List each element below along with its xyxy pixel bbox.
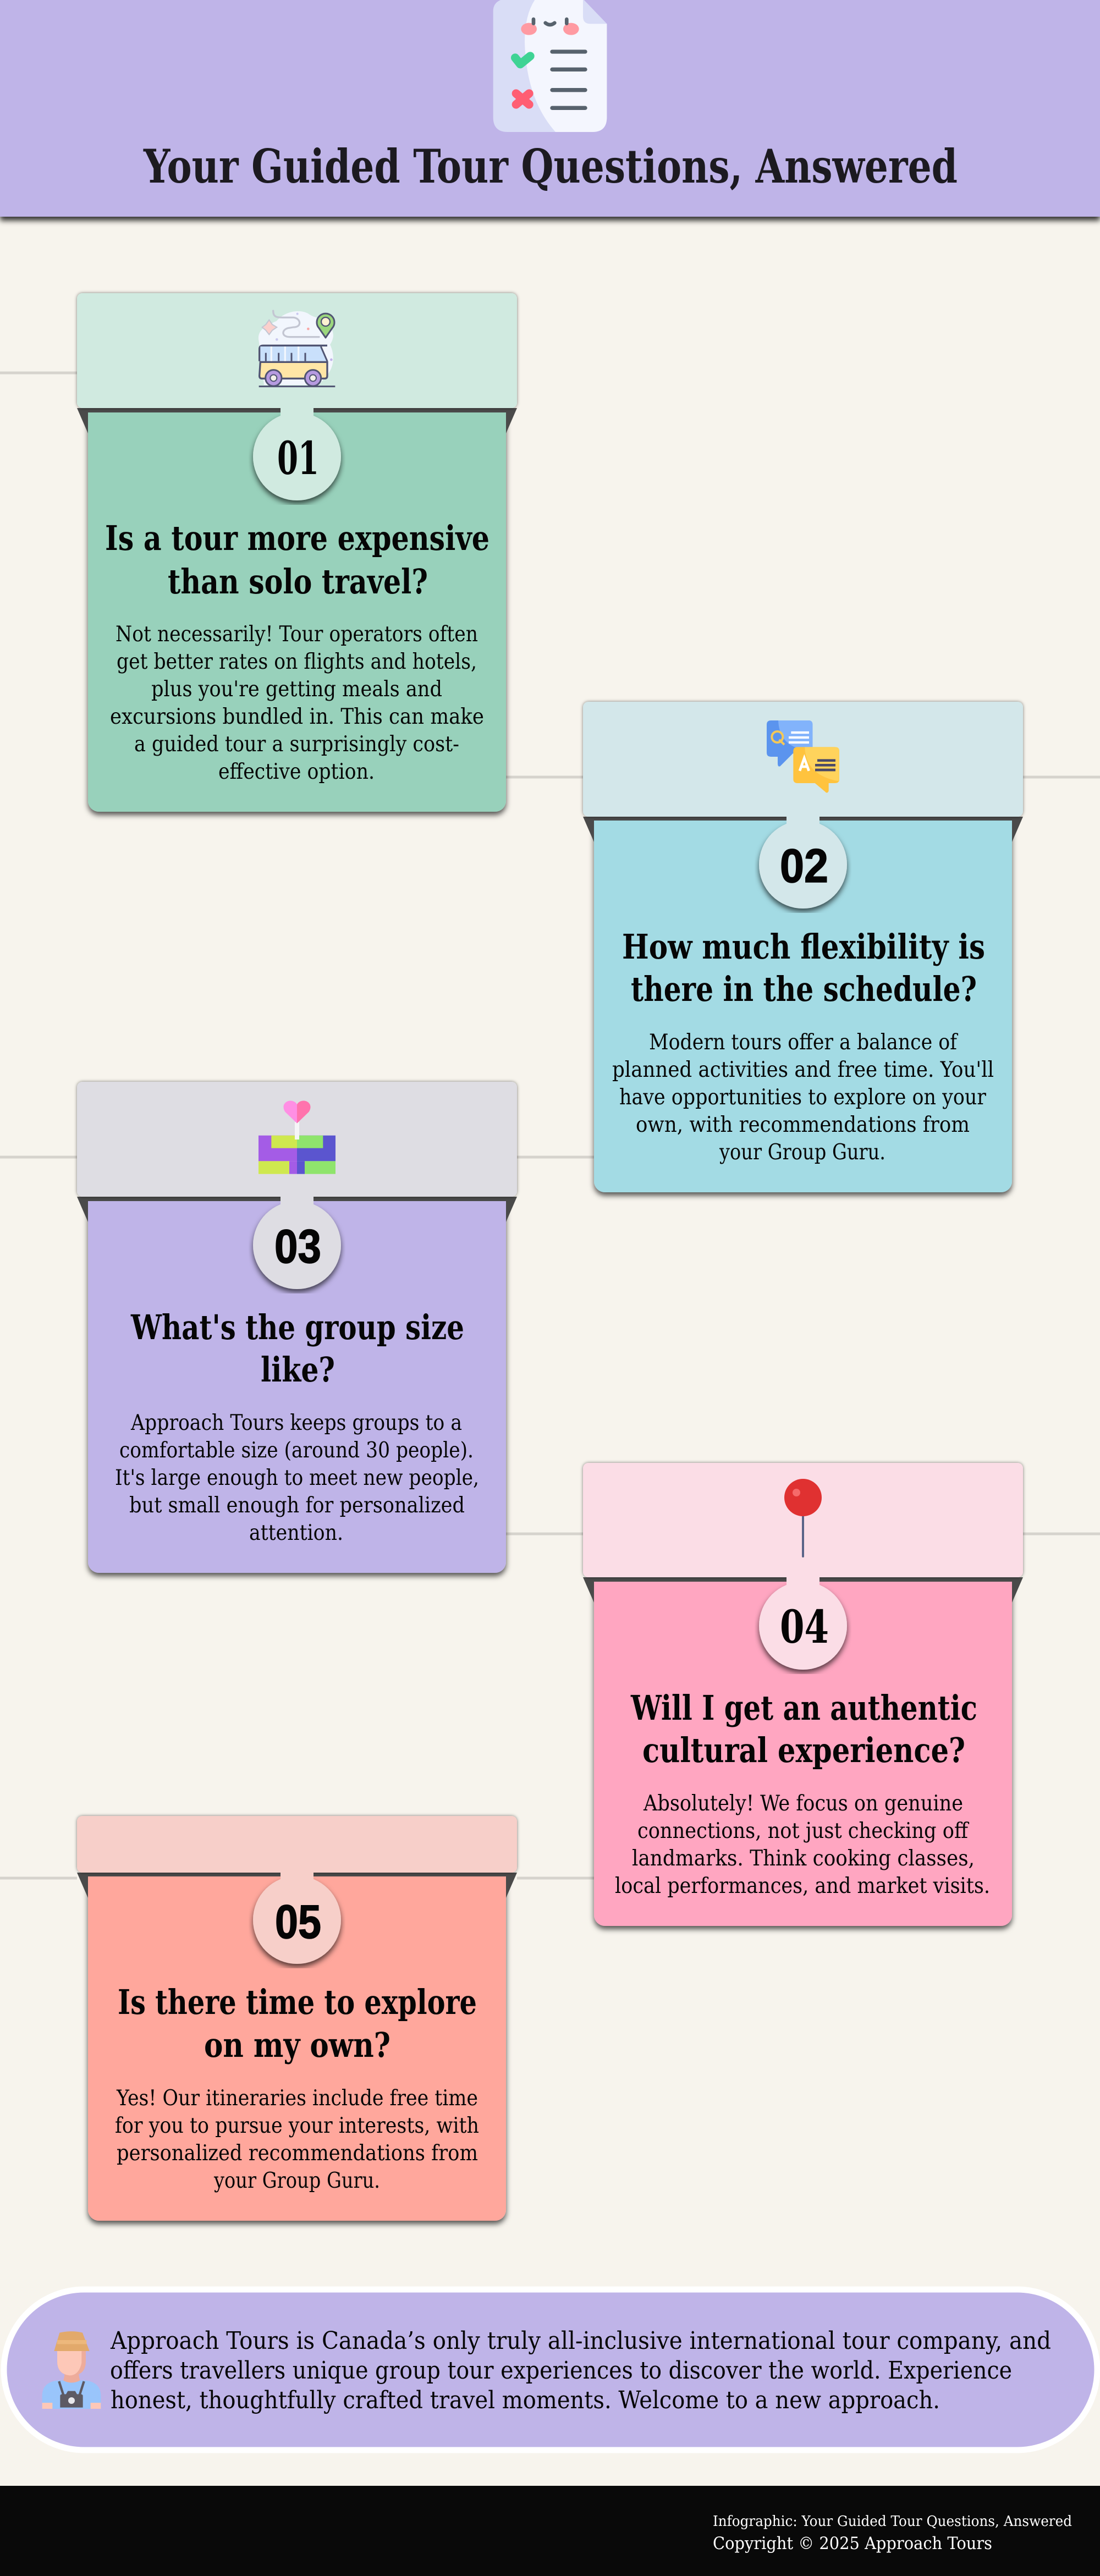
question heading: on my own? <box>204 2025 391 2065</box>
question heading: Is a tour more expensive <box>105 518 490 558</box>
answer text: connections, not just checking off <box>637 1819 970 1843</box>
answer text: Modern tours offer a balance of <box>649 1030 958 1055</box>
question heading: than solo travel? <box>168 562 428 602</box>
connector lines <box>0 373 1100 1878</box>
answer text: excursions bundled in. This can make <box>110 704 484 729</box>
answer text: It's large enough to meet new people, <box>115 1466 479 1490</box>
icon: tour bus <box>258 311 335 387</box>
footer infographic title: Infographic: Your Guided Tour Questions, Answered <box>713 2513 1072 2530</box>
answer text: plus you're getting meals and <box>151 677 442 702</box>
number: 05 <box>275 1896 321 1948</box>
panel: question 02 <box>583 702 1023 1192</box>
question heading <box>130 1307 464 1390</box>
icon: checklist document <box>493 0 607 132</box>
panel: question 04 <box>583 1463 1023 1926</box>
answer text: attention. <box>249 1521 343 1545</box>
answer text: your Group Guru. <box>719 1140 886 1165</box>
answer text: for you to pursue your interests, with <box>115 2113 479 2138</box>
question heading: What's the group size <box>130 1307 464 1347</box>
answer text: Approach Tours keeps groups to a <box>130 1411 462 1435</box>
answer text: a guided tour a surprisingly cost- <box>134 732 459 757</box>
question heading: there in the schedule? <box>631 969 977 1009</box>
answer text <box>615 1791 990 1898</box>
answer text: your Group Guru. <box>213 2168 380 2193</box>
answer text: effective option. <box>218 759 375 784</box>
answer text: but small enough for personalized <box>129 1493 465 1518</box>
answer text: Yes! Our itineraries include free time <box>116 2086 478 2111</box>
icon: question and answer bubbles <box>767 720 839 792</box>
question heading <box>118 1982 477 2065</box>
answer text: own, with recommendations from <box>636 1113 970 1137</box>
icon: map pin <box>784 1479 822 1556</box>
question heading: How much flexibility is <box>622 927 985 967</box>
icon: puzzle blocks with heart <box>258 1100 336 1174</box>
answer text <box>115 2086 479 2193</box>
answer text: local performances, and market visits. <box>615 1874 990 1898</box>
number: 02 <box>780 840 828 893</box>
question heading <box>630 1688 977 1770</box>
question heading: Is there time to explore <box>118 1982 477 2022</box>
panel: about Approach Tours <box>4 2289 1097 2450</box>
question heading: Will I get an authentic <box>630 1688 977 1728</box>
answer text: comfortable size (around 30 people). <box>119 1438 474 1463</box>
answer text <box>612 1030 994 1165</box>
answer text: Not necessarily! Tour operators often <box>116 622 478 647</box>
question heading <box>622 927 985 1009</box>
footer <box>0 2486 1100 2576</box>
company description: offers travellers unique group tour experiences to discover the world. Experience <box>110 2357 1012 2385</box>
answer text: get better rates on flights and hotels, <box>117 649 477 674</box>
panel: question 05 <box>77 1816 517 2221</box>
number: 03 <box>274 1220 321 1273</box>
question heading <box>105 518 490 602</box>
icon: tourist with camera <box>42 2331 101 2409</box>
answer text: landmarks. Think cooking classes, <box>632 1846 975 1871</box>
panel: question 01 <box>77 293 517 812</box>
copyright: Copyright © 2025 Approach Tours <box>713 2534 992 2553</box>
number: 04 <box>780 1601 829 1654</box>
company description: honest, thoughtfully crafted travel moments. Welcome to a new approach. <box>111 2386 940 2414</box>
question heading: like? <box>261 1350 335 1390</box>
answer text <box>110 622 484 784</box>
question heading: cultural experience? <box>642 1730 965 1770</box>
number: 01 <box>277 432 319 485</box>
answer text: Absolutely! We focus on genuine <box>643 1791 963 1816</box>
answer text: planned activities and free time. You'll <box>612 1058 994 1082</box>
company description <box>110 2327 1051 2414</box>
answer text: have opportunities to explore on your <box>619 1085 986 1110</box>
header banner <box>0 0 1100 217</box>
answer text: personalized recommendations from <box>117 2141 478 2166</box>
panel: question 03 <box>77 1082 517 1573</box>
answer text <box>115 1411 479 1545</box>
